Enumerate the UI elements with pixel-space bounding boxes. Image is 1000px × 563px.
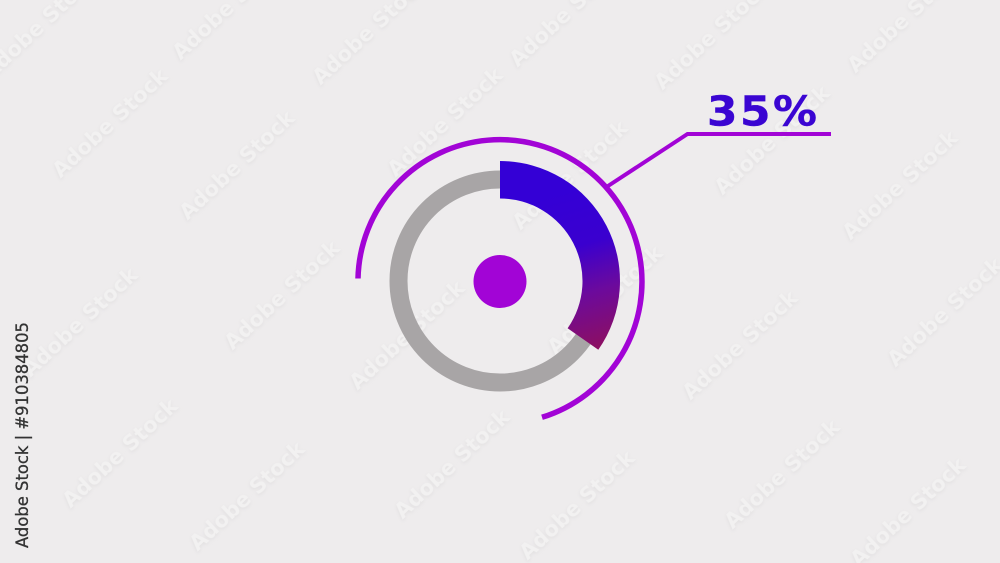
watermark pattern: Adobe Stock — [345, 275, 470, 394]
watermark pattern: Adobe Stock — [18, 262, 143, 381]
center dot — [474, 255, 526, 308]
value label: 35% — [707, 89, 819, 136]
watermark pattern: Adobe Stock — [508, 115, 633, 234]
watermark pattern: Adobe Stock — [515, 445, 640, 563]
watermark pattern: Adobe Stock — [175, 105, 300, 224]
leader line — [608, 134, 831, 186]
watermark pattern: Adobe Stock — [678, 285, 803, 404]
watermark pattern: Adobe Stock — [383, 62, 508, 181]
gradient 35% segment — [500, 161, 620, 350]
grey track ring — [398, 180, 602, 382]
watermark pattern: Adobe Stock — [48, 63, 173, 182]
watermark pattern: Adobe Stock — [220, 235, 345, 354]
vertical credit text: Adobe Stock | #910384805 — [13, 322, 32, 548]
watermark pattern: Adobe Stock — [58, 393, 183, 512]
watermark pattern: Adobe Stock — [390, 404, 515, 523]
watermark pattern: Adobe Stock — [543, 240, 668, 359]
watermark pattern: Adobe Stock — [720, 414, 845, 533]
donut chart: 35% — [398, 161, 620, 382]
watermark pattern: Adobe Stock — [710, 80, 835, 199]
watermark pattern: Adobe Stock — [838, 125, 963, 244]
outer purple arc — [358, 140, 642, 417]
watermark pattern: Adobe Stock — [185, 436, 310, 555]
